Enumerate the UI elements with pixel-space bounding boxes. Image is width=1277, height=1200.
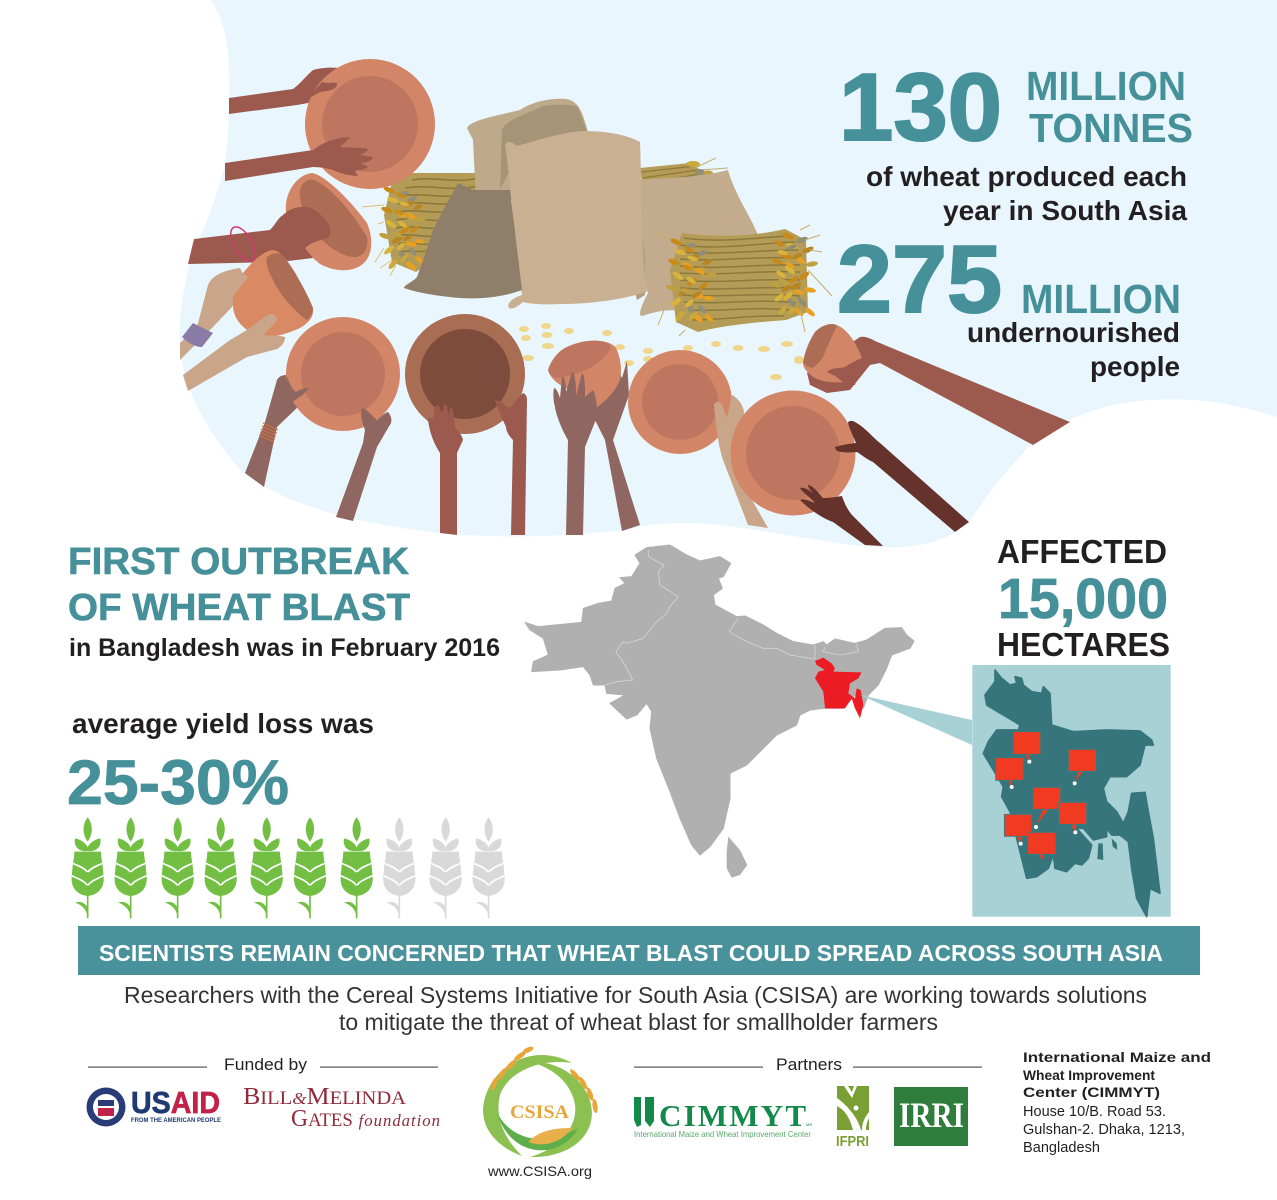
CIMMYT address: Wheat Improvement xyxy=(1023,1067,1155,1083)
partners heading: Partners xyxy=(776,1056,842,1074)
background blob xyxy=(180,0,1277,547)
stat: affected hectares: HECTARES xyxy=(997,626,1170,663)
grain seeds on ground xyxy=(519,323,804,380)
wheat bundle front xyxy=(655,225,832,336)
bowl 4 with hands xyxy=(245,317,400,521)
callout wedge xyxy=(860,695,972,745)
location marker 2 xyxy=(996,758,1023,789)
logo: CIMMYT: CIMMYT xyxy=(659,1098,806,1133)
bowl 1 with hands xyxy=(225,59,435,189)
heading: first outbreak: OF WHEAT BLAST xyxy=(68,587,410,629)
stat: 275 million undernourished xyxy=(837,226,1181,382)
stat: 275 million undernourished: 275 xyxy=(837,226,1002,333)
logo: CIMMYT xyxy=(634,1097,812,1139)
stat: 130 million tonnes: of wheat produced each xyxy=(866,161,1187,192)
heading: first outbreak: FIRST OUTBREAK xyxy=(68,541,410,583)
stat: yield loss: 25-30% xyxy=(67,748,289,818)
CIMMYT address: Center (CIMMYT) xyxy=(1023,1084,1160,1100)
logo: IFPRI xyxy=(836,1086,869,1150)
location marker 7 xyxy=(1028,832,1056,860)
logo: Gates Foundation: GATES foundation xyxy=(291,1106,441,1132)
sack main xyxy=(505,131,647,309)
stat: 130 million tonnes: TONNES xyxy=(1029,105,1193,151)
wheat bundle behind sacks xyxy=(362,173,480,276)
logo: CIMMYT: International Maize and Wheat Improvement Center xyxy=(634,1129,811,1139)
stat: affected hectares xyxy=(997,533,1170,663)
illustration: hands, bowls and wheat sacks xyxy=(180,59,1070,546)
stat: 130 million tonnes: 130 xyxy=(839,54,1002,161)
heading: first outbreak: in Bangladesh was in February 2016 xyxy=(69,634,500,662)
location marker 5 xyxy=(1059,802,1087,834)
CSISA website: www.CSISA.org xyxy=(487,1163,592,1179)
bowl 6 with hands xyxy=(548,341,640,535)
bowl 3 with pale hands xyxy=(180,250,313,391)
location marker 6 xyxy=(1004,814,1032,846)
researchers text: Researchers with the Cereal Systems Initiative for South Asia (CSISA) are working towards solutions xyxy=(124,982,1147,1008)
logo: CSISA: CSISA xyxy=(510,1102,569,1123)
CIMMYT address xyxy=(1023,1049,1211,1156)
sack right xyxy=(609,170,760,316)
logo: Gates Foundation xyxy=(243,1084,441,1132)
CIMMYT address: House 10/B. Road 53. xyxy=(1023,1104,1166,1120)
location marker 1 xyxy=(1013,732,1041,764)
stat: yield loss xyxy=(67,708,374,818)
logo: IFPRI: IFPRI xyxy=(836,1133,869,1150)
CIMMYT address: International Maize and xyxy=(1023,1049,1211,1065)
heading: first outbreak xyxy=(68,541,500,662)
researchers text: to mitigate the threat of wheat blast for smallholder farmers xyxy=(339,1009,938,1035)
logo: CSISA xyxy=(483,1045,598,1157)
logo: IRRI xyxy=(894,1087,968,1146)
researchers text xyxy=(124,982,1147,1035)
Bangladesh highlight xyxy=(815,658,863,718)
inset map of Bangladesh xyxy=(972,665,1171,917)
wheat icons: seven of ten green xyxy=(72,817,505,918)
bowl 7 and 8 with hands xyxy=(628,350,969,546)
CIMMYT address: Gulshan-2. Dhaka, 1213, xyxy=(1023,1122,1185,1138)
location marker 3 xyxy=(1068,749,1096,785)
stat: 275 million undernourished: people xyxy=(1090,351,1180,382)
stat: 130 million tonnes: year in South Asia xyxy=(943,195,1187,226)
cup with arm right xyxy=(803,324,1070,445)
stat: 275 million undernourished: undernourished xyxy=(967,317,1180,348)
logo: IRRI: IRRI xyxy=(899,1095,964,1135)
bowl 2 with hand xyxy=(188,173,371,270)
bowl 5 with hands xyxy=(405,314,527,535)
logo: CIMMYT: MR xyxy=(806,1122,812,1127)
bangles xyxy=(259,423,278,442)
stat: affected hectares: 15,000 xyxy=(998,567,1168,631)
wheat bundle upper right xyxy=(640,158,728,190)
logo: USAID xyxy=(86,1085,222,1126)
stat: 130 million tonnes: MILLION xyxy=(1026,63,1186,109)
sack grey xyxy=(404,183,522,298)
CIMMYT address: Bangladesh xyxy=(1023,1140,1100,1156)
map of South Asia xyxy=(525,545,914,878)
banner xyxy=(78,926,1200,975)
stat: yield loss: average yield loss was xyxy=(72,708,374,739)
sack back xyxy=(467,99,600,200)
stat: 130 million tonnes xyxy=(839,54,1193,226)
location marker 4 xyxy=(1033,787,1061,829)
funded by heading: Funded by xyxy=(224,1056,308,1074)
logo: USAID: FROM THE AMERICAN PEOPLE xyxy=(131,1117,222,1124)
logo: USAID: USAID xyxy=(131,1085,220,1120)
logo: Gates Foundation: BILL&MELINDA xyxy=(243,1084,406,1110)
stat: 275 million undernourished: MILLION xyxy=(1021,276,1181,322)
banner: SCIENTISTS REMAIN CONCERNED THAT WHEAT BLAST COULD SPREAD ACROSS SOUTH ASIA xyxy=(99,940,1163,966)
stat: affected hectares: AFFECTED xyxy=(997,533,1167,570)
